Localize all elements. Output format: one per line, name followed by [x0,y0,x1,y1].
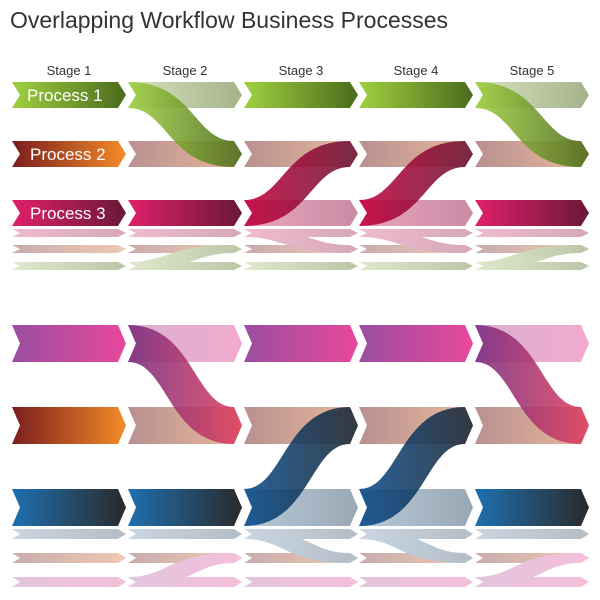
reflection bottom [12,529,589,587]
title: Overlapping Workflow Business Processes [10,7,448,33]
row: process 1: Process 1 [27,86,103,105]
row B orange [12,407,589,444]
stage labels: Stage 3 [279,63,323,78]
row: process 2 [12,141,589,167]
stage labels: Stage 1 [47,63,91,78]
stage labels: Stage 5 [510,63,554,78]
bottom diagram [12,325,589,587]
stage labels [47,63,554,78]
row: process 3 [12,200,589,226]
row: process 1 [12,82,589,108]
top diagram [12,82,589,270]
stage labels: Stage 4 [394,63,438,78]
s-curves bottom [128,325,589,526]
row: process 3: Process 3 [30,204,106,223]
s-curves top [128,82,589,226]
reflection top [12,229,589,270]
row: process 2: Process 2 [30,145,106,164]
row C blue [12,489,589,526]
row A purple [12,325,589,362]
stage labels: Stage 2 [163,63,207,78]
